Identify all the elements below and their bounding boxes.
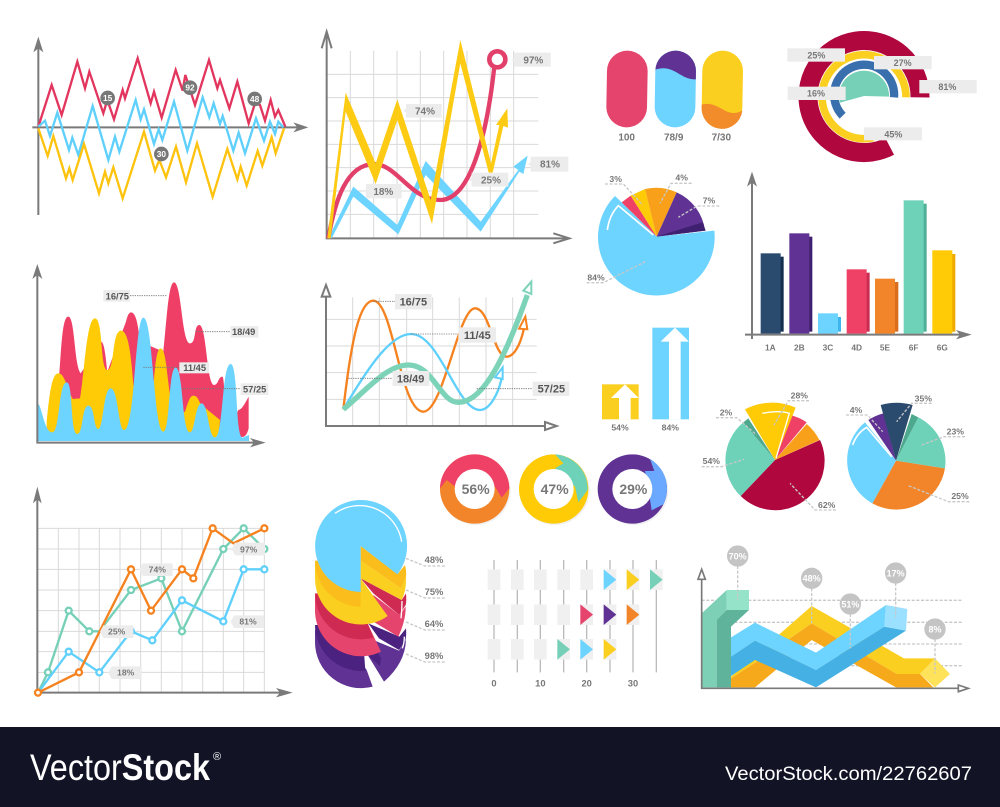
pie chart: navy wedge: 25% — [951, 491, 969, 501]
panel: donuts, stacked pies and slider chart — [315, 454, 668, 689]
radial bar chart: 25% — [807, 50, 825, 60]
blue area — [37, 318, 249, 441]
footer image id: VectorStock.com/22762607 — [725, 764, 972, 785]
bar chart: 1A — [765, 342, 776, 352]
axes — [33, 487, 293, 697]
blue line — [38, 97, 283, 160]
slider chart: 20 — [581, 679, 592, 689]
value badges: 30 — [157, 149, 166, 159]
green column — [702, 590, 749, 687]
red line — [38, 58, 285, 127]
pie chart: yellow wedge — [702, 391, 836, 510]
value tags — [363, 53, 568, 198]
pie chart: yellow wedge: 2% — [720, 408, 733, 418]
pie chart: yellow wedge: 28% — [791, 391, 808, 401]
radial bar chart: 16% — [807, 89, 825, 99]
value badges: 48 — [250, 94, 260, 104]
axes — [322, 285, 557, 430]
pie chart: navy wedge — [846, 393, 969, 510]
callouts: 18/49 — [232, 327, 255, 337]
value tags: 18% — [117, 668, 135, 678]
value tags: 25% — [481, 175, 501, 186]
value tags: 81% — [239, 617, 257, 627]
panel: area chart — [32, 264, 268, 447]
bar chart: 6G — [937, 342, 948, 352]
panel: ribbon line chart — [322, 32, 569, 243]
panel: pill gauges, radial chart and pie — [587, 41, 977, 295]
footer logo: VectorStock — [30, 747, 210, 788]
red pie layer — [315, 578, 406, 656]
exploded pie chart: 4% — [675, 172, 688, 182]
value tags: 25% — [108, 627, 126, 637]
blue curve — [343, 334, 503, 410]
value tags: 81% — [540, 160, 560, 171]
bar chart: 3C — [823, 342, 833, 352]
green curve — [343, 282, 531, 409]
panel: marker line chart — [33, 487, 293, 697]
value tags: 74% — [149, 565, 166, 575]
pie chart: yellow wedge: 54% — [703, 456, 720, 466]
callouts: 16/75 — [106, 291, 129, 301]
bar chart: 4D — [851, 342, 862, 352]
value badges: 92 — [185, 83, 195, 93]
radial bar chart: 45% — [884, 129, 902, 139]
footer bar — [0, 727, 1000, 807]
orange line — [35, 525, 267, 696]
slider chart — [488, 560, 663, 689]
pie chart: navy wedge: 23% — [947, 427, 964, 437]
bar chart: 6F — [909, 342, 919, 352]
callouts: 57/25 — [538, 384, 565, 396]
axes — [322, 32, 569, 243]
yellow pie layer — [315, 546, 406, 625]
bar chart — [745, 172, 972, 352]
orange curve — [343, 301, 527, 412]
value tags: 97% — [240, 544, 258, 554]
exploded pie chart: 84% — [587, 273, 605, 283]
stacked pie chart: 64% — [425, 619, 444, 629]
axes — [32, 264, 266, 447]
exploded pie chart: 7% — [703, 195, 716, 205]
arrow bars — [602, 328, 689, 433]
panel: smooth curves chart — [322, 282, 569, 430]
value badges — [100, 80, 262, 161]
pill gauges: 100 — [618, 133, 635, 144]
exploded pie chart: 3% — [609, 174, 622, 184]
callouts: 18/49 — [397, 373, 424, 385]
stacked pie chart: 98% — [425, 651, 444, 661]
slider chart: 10 — [535, 679, 546, 689]
pie chart: yellow wedge: 62% — [818, 500, 836, 510]
dashed levels — [702, 600, 962, 666]
arrow bars: 54% — [611, 423, 629, 433]
arrow bars: 84% — [662, 423, 679, 433]
value tags: 97% — [523, 55, 543, 66]
percentage badges: 8% — [928, 624, 941, 634]
stacked pie chart — [315, 500, 446, 688]
pill gauges: 78/9 — [664, 133, 684, 144]
value badges: 15 — [103, 93, 113, 103]
donut: 47% — [519, 454, 590, 525]
pie chart: navy wedge: 35% — [915, 393, 932, 403]
yellow ribbon — [327, 40, 508, 238]
value tags — [100, 543, 265, 679]
percentage badges: 17% — [887, 568, 905, 578]
axes — [698, 569, 968, 692]
pill gauges — [606, 50, 743, 144]
callouts — [348, 294, 569, 396]
value tags: 74% — [415, 106, 435, 117]
panel: 3D ribbon chart — [698, 545, 968, 692]
radial bar chart: 27% — [894, 58, 912, 68]
yellow area — [47, 318, 220, 440]
grid — [326, 297, 537, 425]
chart axes — [32, 37, 308, 215]
panel: bar chart, arrows and pies — [602, 172, 972, 510]
grid — [37, 528, 264, 693]
callouts: 11/45 — [464, 330, 491, 342]
pill gauges: 7/30 — [712, 133, 731, 144]
stacked pie chart: 75% — [425, 587, 444, 597]
yellow ribbon — [731, 606, 950, 687]
percentage badges: 51% — [841, 599, 859, 609]
blue ribbon — [328, 156, 528, 238]
pie chart: navy wedge: 4% — [850, 405, 863, 415]
donut: 29% — [598, 454, 668, 525]
percentage badges: 70% — [729, 551, 747, 561]
green line — [38, 525, 267, 693]
grid — [327, 51, 538, 238]
radial bar chart — [787, 41, 977, 153]
slider chart: 0 — [491, 679, 497, 689]
bar chart: 2B — [794, 342, 805, 352]
registered mark: ® — [213, 751, 221, 763]
percentage badges — [727, 545, 946, 673]
callouts — [103, 290, 268, 395]
value tags: 18% — [373, 187, 393, 198]
blue line — [38, 566, 267, 693]
red curve — [328, 51, 505, 238]
donut: 56%: 56% — [462, 481, 490, 497]
exploded pie chart — [587, 172, 719, 295]
panel: zigzag line chart — [32, 37, 308, 215]
red area — [59, 282, 249, 440]
callouts: 57/25 — [243, 384, 266, 394]
blue pie layer — [315, 500, 407, 592]
donut: 56% — [440, 454, 511, 525]
donut: 47%: 47% — [541, 481, 569, 497]
bar chart: 5E — [880, 342, 891, 352]
percentage badges: 48% — [803, 574, 821, 584]
callouts: 16/75 — [400, 297, 427, 309]
callouts: 11/45 — [183, 363, 206, 373]
blue ribbon — [731, 605, 907, 687]
stacked pie chart: 48% — [425, 555, 444, 565]
donut: 29%: 29% — [619, 481, 648, 497]
slider chart: 30 — [628, 679, 638, 689]
purple pie layer — [315, 623, 406, 688]
yellow line — [38, 128, 284, 198]
radial bar chart: 81% — [938, 82, 956, 92]
